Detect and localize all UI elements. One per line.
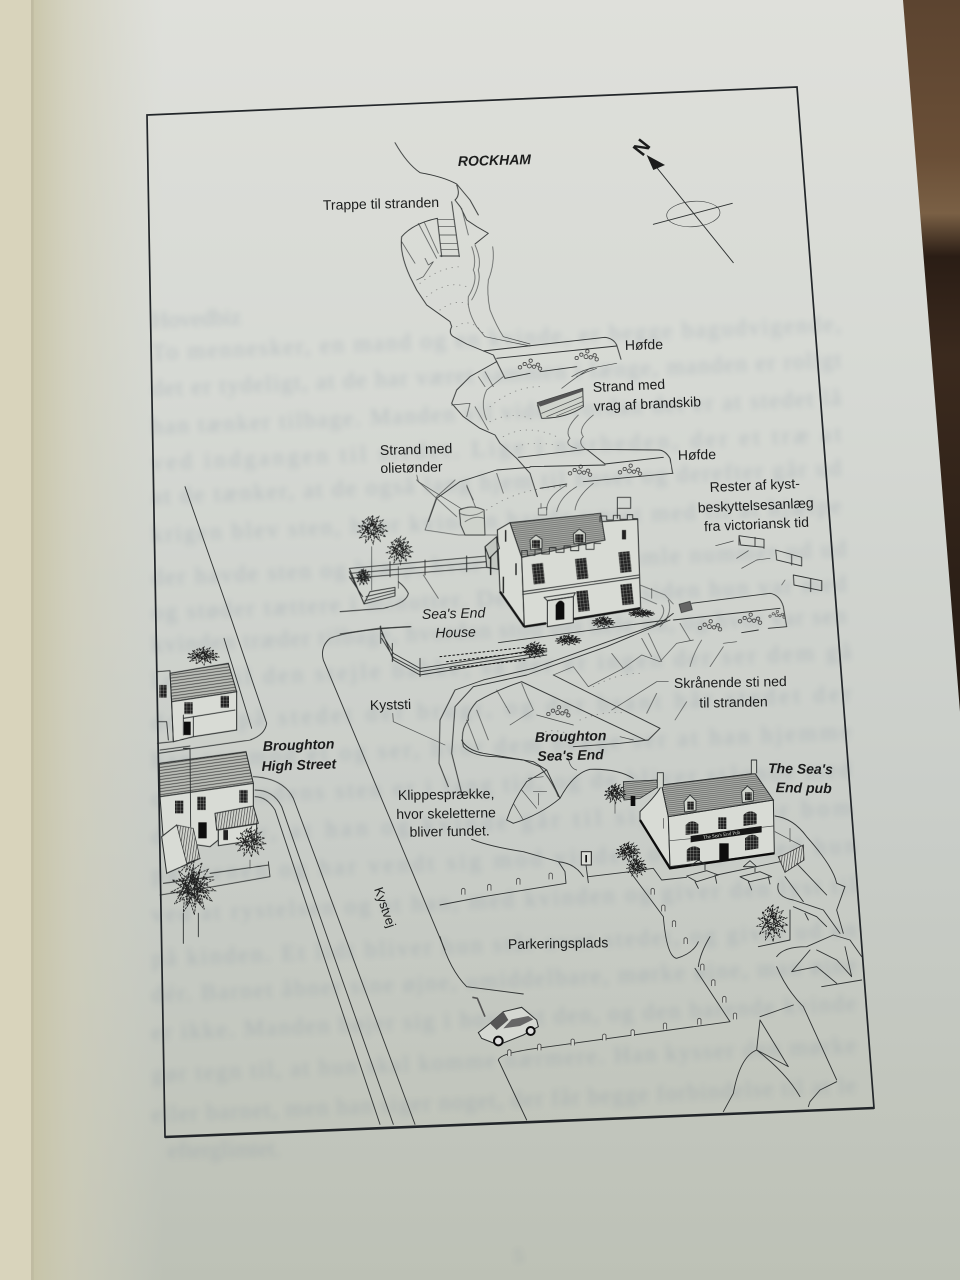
label: The Sea's End pub: End pub [776, 779, 832, 796]
label: Broughton Sea's End: Broughton [535, 727, 607, 745]
label: Sea's End House: House [435, 624, 476, 641]
map: pub, parking and southern cliffs [440, 740, 862, 1120]
cliffs near Rockham [395, 143, 505, 378]
garden walls [160, 862, 270, 895]
label: groyne two: Høfde [678, 446, 716, 463]
show-through text from the next page: dér. Barnet åbner sine øjne, umiddelbare, mørke øjne, man øjne [151, 952, 857, 1007]
southern cliffs [723, 816, 862, 1112]
staircase to the beach [437, 202, 459, 257]
oil barrels [417, 480, 497, 535]
label: Broughton High Street: Broughton [263, 736, 335, 754]
fence with hedge [380, 609, 667, 677]
road to parking [322, 627, 445, 950]
show-through text from the next page: 5 [514, 1246, 523, 1266]
show-through text from the next page: Hovedbiz [151, 304, 242, 333]
label: rock crevice where the skeletons are found: bliver fundet. [409, 822, 490, 840]
show-through text from the next page: kvinden træder tilbage, hvordan stod det hele nu, og hvor var sen [151, 603, 847, 657]
trees by the pen [356, 515, 413, 590]
label: Broughton High Street: High Street [261, 755, 338, 774]
show-through text from the next page: ved at rystelsen og at han, med kvinden og giver den lyst til [151, 872, 857, 927]
label: beach with fireship wreck: vrag af brandskib [593, 393, 701, 414]
bush on the cliff [757, 904, 790, 947]
label: coastal road: Kystvej [371, 885, 399, 930]
label: beach with oil barrels: olietønder [380, 458, 443, 476]
groyne two [518, 449, 673, 488]
show-through text from the next page: han ser mod et og ser, hvor dem begge ser at han hjemme [151, 719, 852, 773]
label: rock crevice where the skeletons are found: hvor skeletterne [396, 804, 496, 822]
icon: parked car [472, 997, 538, 1045]
book gutter shading [0, 0, 163, 1280]
show-through text from the next page: langs til den stejle bakke, så der er ingen der ser dem gå [151, 639, 852, 693]
label: Broughton Sea's End: Sea's End [537, 746, 604, 764]
show-through text from the next page: og støder tættere i minutter. Det var længe siden hun var med [151, 571, 847, 625]
coastal path Kyststi [439, 613, 673, 793]
show-through text from the next page: ved indgangen til stedet. Lige i nærheden, der et træ at [151, 421, 842, 475]
lower cliff with oil barrels beach [417, 467, 593, 522]
show-through text from the next page: de hviler, at han og kvinde går til sig, så der er bom [151, 795, 852, 849]
show-through text from the next page: krigen blev sten, hvor kvinden havde været med til at hjælpe [151, 493, 842, 547]
information sign [581, 852, 591, 883]
garden wall and path right of house [640, 585, 692, 627]
wooden table corner [903, 0, 960, 712]
show-through text from the next page: og et kvindens sten er i lang tid, og de bliver stående med [151, 757, 852, 811]
sand and waves, upper beach [420, 245, 530, 346]
groyne three [673, 593, 787, 633]
label: remains of Victorian coastal defences: Rester af kyst- [709, 475, 801, 495]
show-through text from the next page: efterglimtet. [168, 1136, 281, 1163]
beer garden tables [687, 860, 772, 890]
middle cliff [452, 362, 563, 497]
label: Sea's End House: Sea's End [422, 604, 487, 622]
show-through text from the next page: er ikke. Manden bøjer sig i hovedet den, og den barende kvinde [151, 990, 857, 1045]
show-through text from the next page [151, 304, 857, 1266]
Kystvej road [253, 777, 415, 1124]
map labels [261, 151, 833, 952]
map: northern coast, stairs and beaches [395, 135, 733, 522]
label: car park: Parkeringsplads [508, 934, 608, 952]
roads near the house [340, 582, 411, 634]
show-through text from the next page: på kinden. Et lidt bliver hun står over stedet, og giver ud en [151, 916, 857, 971]
show-through text from the next page: at de tænker, at de også lang hjem til huset og derefter går ud [151, 455, 842, 509]
road upper lines [158, 487, 267, 753]
label: Rockham: ROCKHAM [458, 151, 531, 169]
label: sloping path to the beach: Skrånende sti ned [674, 673, 787, 691]
icon: compass north arrow [629, 135, 733, 263]
pub outbuilding and trees [604, 780, 658, 876]
show-through text from the next page: der havde sten og hjælp, hvor man skulle samle nummer ud ud [151, 536, 847, 590]
groyne one [483, 337, 621, 388]
label: groyne one: Høfde [625, 336, 663, 353]
label: beach with oil barrels: Strand med [380, 440, 452, 458]
icon: compass north arrow: N [629, 135, 655, 160]
label: rock crevice where the skeletons are found: Klippesprække, [398, 785, 495, 803]
label: sloping path to the beach: til stranden [699, 693, 768, 711]
The Sea's End pub building [640, 760, 774, 868]
pub sign: The Sea's End Pub [703, 831, 741, 841]
parking edges [440, 872, 730, 1120]
row house with annex [159, 748, 258, 873]
victorian coastal defence blocks [716, 536, 822, 592]
road edges and fence [440, 839, 780, 905]
label: stairs to the beach: Trappe til stranden [323, 194, 439, 213]
slipway and cliffs below [462, 623, 737, 797]
leader line to Sea's End House [423, 575, 438, 598]
map: left side roads and village houses [157, 487, 445, 1124]
show-through text from the next page: gør tegn til, at hun skal komme nærmere. Han kysser den mørke [151, 1032, 857, 1087]
label: beach with fireship wreck: Strand med [592, 376, 665, 395]
Sea's End House building [485, 497, 641, 627]
map: Sea's End House and surroundings [340, 480, 822, 797]
show-through text from the next page: det er tydeligt, at de har været sammen i længe, manden er roligt [151, 347, 842, 401]
trees in garden [171, 827, 266, 943]
show-through text from the next page: eller barnet, men han siger noget, der får begge forbindelse til at le [151, 1072, 857, 1127]
label: remains of Victorian coastal defences: beskyttelsesanlæg [697, 494, 814, 516]
show-through text from the next page: han tænker tilbage. Manden vil vide hvordan det er at stedet lå [151, 385, 842, 439]
label: The Sea's End pub: The Sea's [768, 760, 833, 777]
label: coastal path: Kyststi [370, 696, 411, 713]
show-through text from the next page: To mennesker, en mand og en kvinde, er begge bagudvigende, [151, 311, 842, 365]
bollards [462, 873, 737, 1056]
waves below the wreck [568, 415, 593, 450]
cleft where skeletons are found [462, 740, 633, 823]
fence pen and fence to house [349, 556, 487, 604]
house with bush [157, 647, 237, 743]
label: remains of Victorian coastal defences: fra victoriansk tid [704, 514, 809, 534]
map frame [147, 87, 874, 1137]
icon: fireship wreck [537, 388, 583, 418]
show-through text from the next page: på stenen og har vendt sig mod vinden og tager ved hun [151, 832, 857, 887]
garden fence gate [775, 828, 804, 872]
leader line to Kyststi [393, 713, 445, 745]
show-through text from the next page: der er på stedet der brugt, og der brant hår stedet der [151, 681, 852, 735]
